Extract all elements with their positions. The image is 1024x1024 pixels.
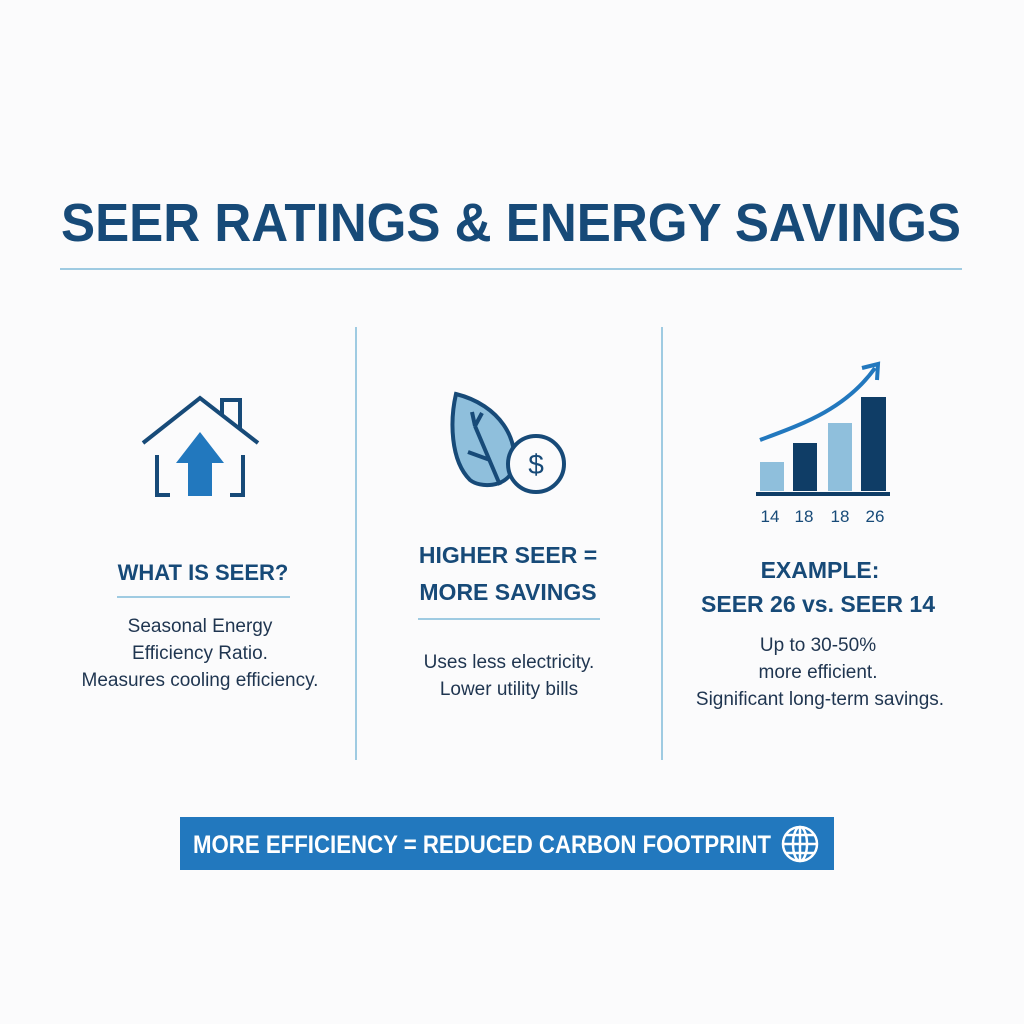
text: definition: Measures cooling efficiency. [82,670,318,691]
heading: example: EXAMPLE: [761,557,879,583]
text: example detail: more efficient. [759,662,877,683]
banner: carbon footprint: MORE EFFICIENCY = REDUCED CARBON FOOTPRINT [193,831,771,859]
text: example detail: Significant long-term savings. [696,689,944,710]
panel: what is seer [82,398,318,691]
bar chart: 18 [831,507,849,526]
text: definition: Efficiency Ratio. [132,643,268,664]
icon: house with arrow [143,398,258,496]
icon: leaf and coin: $ [528,449,544,480]
heading: what is seer: WHAT IS SEER? [118,560,288,585]
text: savings: Uses less electricity. [424,652,594,673]
bar chart [756,364,890,526]
heading: higher seer: HIGHER SEER = [419,542,597,568]
bar chart: 26 [866,507,884,526]
text: definition: Seasonal Energy [128,616,273,637]
panel: example [696,364,944,710]
icon: globe [783,827,817,861]
bar chart: 14 [761,507,779,526]
bar chart: 18 [795,507,813,526]
icon: leaf and coin [453,394,564,492]
heading: higher seer: MORE SAVINGS [419,579,597,605]
title: SEER RATINGS & ENERGY SAVINGS [61,193,961,253]
text: savings: Lower utility bills [440,679,578,700]
banner: carbon footprint [180,817,834,870]
heading: example: SEER 26 vs. SEER 14 [701,591,935,617]
text: example detail: Up to 30-50% [760,635,876,656]
panel: higher seer [418,394,600,700]
